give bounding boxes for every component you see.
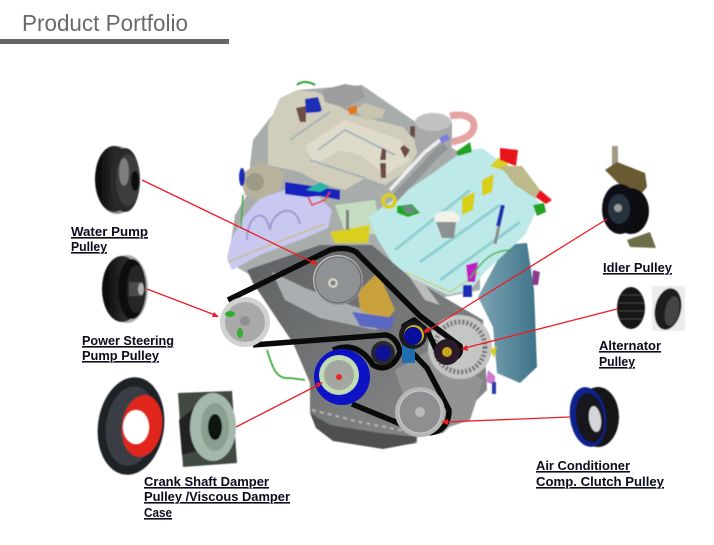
label: water pump pulley: [71, 224, 148, 254]
dipstick pipe and white tube: [393, 146, 446, 200]
yellow bracket: [330, 225, 370, 243]
label: alternator pulley: Pulley: [599, 354, 636, 369]
green hose: [267, 350, 305, 380]
lavender left cover: [227, 190, 332, 270]
red caps: [500, 148, 518, 166]
label: air conditioner comp clutch pulley: Comp. Clutch Pulley: [536, 474, 665, 489]
label: crank shaft damper pulley: [144, 474, 290, 520]
label: power steering pump pulley: Pump Pulley: [82, 348, 160, 363]
small idler pulley on engine: [371, 341, 395, 365]
tank: blue-teal housing: [478, 243, 537, 383]
intake manifold: [268, 90, 420, 190]
label: water pump pulley: Water Pump: [71, 224, 148, 239]
water pump pulley on engine: [313, 255, 363, 305]
label: idler pulley: Idler Pulley: [603, 260, 673, 275]
power steering pulley on engine: [220, 297, 270, 347]
oil filler cap: [434, 211, 460, 225]
oil pan: [310, 413, 417, 449]
title underline bar: [0, 39, 229, 44]
yellow injectors: [462, 192, 475, 215]
engine illustration: [220, 82, 552, 449]
alternator body: [428, 315, 492, 379]
photo: water pump pulley: [95, 146, 140, 214]
photo: viscous damper case: [178, 391, 237, 467]
intake runner bolts: [296, 106, 416, 178]
blue dipstick: [495, 212, 502, 244]
leader arrows: [142, 180, 617, 427]
photo: air conditioner clutch pulley: [566, 385, 619, 449]
tensioner pulley on engine: [399, 321, 427, 363]
green connector: [397, 204, 420, 217]
throttle body: [240, 162, 285, 200]
top sensors: [322, 84, 365, 108]
drive belt: [228, 248, 460, 433]
AC compressor pulley on engine: [395, 387, 445, 437]
label: air conditioner comp clutch pulley: [536, 458, 665, 489]
photo: alternator pulley: [617, 286, 685, 332]
block mid rib: [272, 272, 395, 330]
alternator pulley on engine: [434, 339, 460, 365]
blue throttle parts: [305, 97, 322, 113]
title: Product Portfolio: [22, 10, 188, 36]
oil cap cylinder: [415, 115, 452, 162]
lower housing: [395, 350, 483, 430]
label: crank shaft damper pulley: Case: [144, 505, 172, 520]
pink hose: [450, 115, 474, 142]
upper backdrop: [228, 85, 480, 300]
gap between heads: [335, 200, 382, 235]
label: power steering pump pulley: [82, 333, 174, 363]
engine block: [247, 245, 487, 448]
label: power steering pump pulley: Power Steering: [82, 333, 174, 348]
valve cover light cyan: [368, 148, 540, 295]
photo: power steering pulley: [102, 255, 148, 323]
crankshaft damper pulley on engine: [314, 349, 370, 405]
label: air conditioner comp clutch pulley: Air Conditioner: [536, 458, 630, 473]
magenta part: [466, 262, 478, 282]
pink lower bits: [486, 370, 495, 385]
label: alternator pulley: [599, 338, 661, 369]
label: water pump pulley: Pulley: [71, 239, 108, 254]
photo: idler pulley: [602, 146, 656, 248]
label: crank shaft damper pulley: Pulley /Viscous Damper: [144, 489, 290, 504]
photo: crank shaft damper pulley: [92, 373, 170, 479]
label: crank shaft damper pulley: Crank Shaft Damper: [144, 474, 269, 489]
label: alternator pulley: Alternator: [599, 338, 661, 353]
